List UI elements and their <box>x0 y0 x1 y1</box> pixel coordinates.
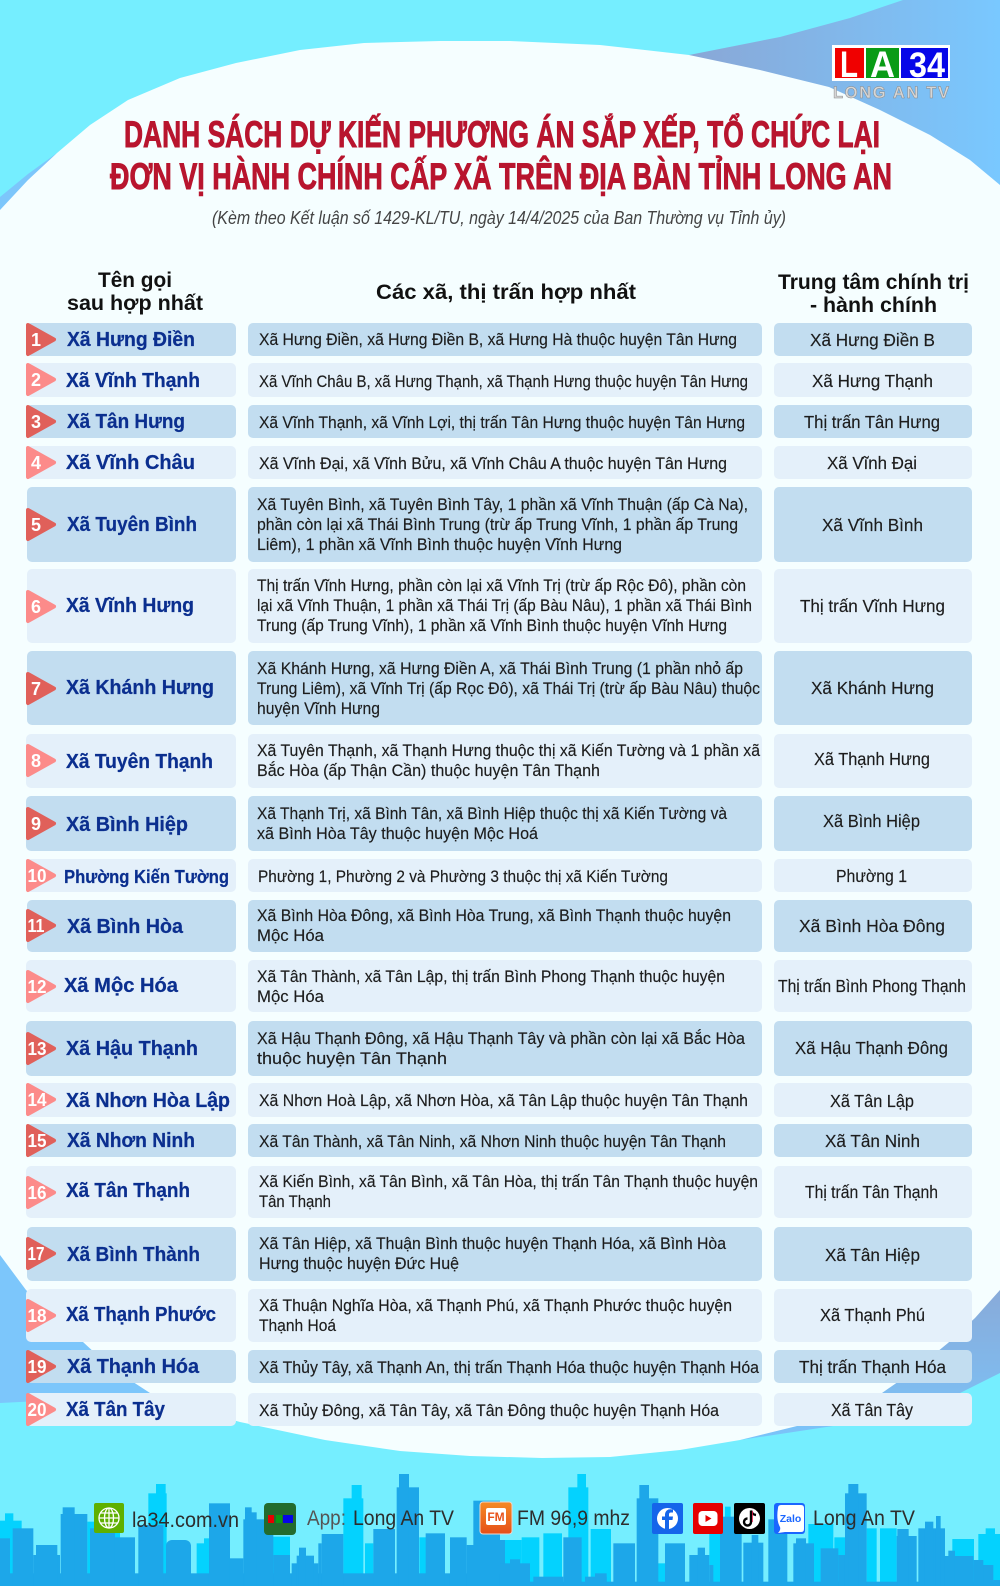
row 15: Xã Nhơn Ninh <box>67 1129 195 1152</box>
row 6: lại xã Vĩnh Thuận, 1 phần xã Thái Trị (ấp Bàu Nâu), 1 phần xã Thái Bình <box>257 597 752 615</box>
row 1: Xã Hưng Điền, xã Hưng Điền B, xã Hưng Hà thuộc huyện Tân Hưng <box>259 331 737 349</box>
footer: zalo label: Long An TV <box>813 1507 915 1530</box>
row 17: 17 <box>28 1244 44 1264</box>
row 7: Xã Khánh Hưng, xã Hưng Điền A, xã Thái Bình Trung (1 phần nhỏ ấp <box>257 660 743 678</box>
row 18 <box>26 1289 972 1342</box>
row 7: Xã Khánh Hưng <box>66 676 214 699</box>
row 7: huyện Vĩnh Hưng <box>257 700 380 718</box>
row 10 <box>26 859 972 892</box>
row 4: 4 <box>31 453 41 473</box>
row 6 <box>27 569 972 643</box>
row 12: Mộc Hóa <box>257 988 325 1006</box>
row 13: 13 <box>28 1039 46 1059</box>
footer: FM radio <box>480 1502 630 1534</box>
footer: app: App: <box>307 1507 346 1530</box>
row 1: Xã Hưng Điền B <box>810 330 935 350</box>
row 5 <box>27 487 972 562</box>
row 6: Thị trấn Vĩnh Hưng, phần còn lại xã Vĩnh Trị (trừ ấp Rộc Đô), phần còn <box>257 577 746 595</box>
icon: facebook <box>652 1503 683 1534</box>
logo: 34 <box>909 46 945 85</box>
row 11: Xã Bình Hòa Đông, xã Bình Hòa Trung, xã Bình Thạnh thuộc huyện <box>257 907 731 925</box>
row 9: Xã Thạnh Trị, xã Bình Tân, xã Bình Hiệp thuộc thị xã Kiến Tường và <box>257 805 728 823</box>
row 9: xã Bình Hòa Tây thuộc huyện Mộc Hoá <box>257 825 539 843</box>
row 16: Tân Thạnh <box>259 1193 331 1211</box>
row 5: 5 <box>31 515 41 535</box>
row 1: Xã Hưng Điền <box>67 328 195 351</box>
footer: website <box>94 1503 239 1533</box>
row 4: Xã Vĩnh Đại, xã Vĩnh Bửu, xã Vĩnh Châu A thuộc huyện Tân Hưng <box>259 455 727 473</box>
row 5: Xã Vĩnh Bình <box>822 515 923 535</box>
title <box>110 112 892 197</box>
footer: FM radio: FM <box>487 1510 505 1524</box>
row 12 <box>26 960 972 1012</box>
row 2: Xã Hưng Thạnh <box>812 371 933 391</box>
row 12: Thị trấn Bình Phong Thạnh <box>778 976 966 996</box>
row 10: Phường 1, Phường 2 và Phường 3 thuộc thị xã Kiến Tường <box>258 868 668 886</box>
row 1: 1 <box>31 330 41 350</box>
row 12: 12 <box>28 977 46 997</box>
logo <box>832 44 950 102</box>
row 7: Xã Khánh Hưng <box>811 678 934 698</box>
row 13: Xã Hậu Thạnh Đông <box>795 1038 948 1058</box>
row 8: Xã Tuyên Thạnh <box>66 750 213 773</box>
row 15: Xã Tân Ninh <box>825 1131 920 1151</box>
row 11: Mộc Hóa <box>257 927 325 945</box>
row 20: Xã Thủy Đông, xã Tân Tây, xã Tân Đông thuộc huyện Thạnh Hóa <box>259 1402 720 1420</box>
row 20: Xã Tân Tây <box>66 1398 166 1421</box>
row 7 <box>27 651 972 725</box>
row 8: Xã Tuyên Thạnh, xã Thạnh Hưng thuộc thị xã Kiến Tường và 1 phần xã <box>257 742 761 760</box>
row 14: Xã Nhơn Hoà Lập, xã Nhơn Hòa, xã Tân Lập thuộc huyện Tân Thạnh <box>259 1092 748 1110</box>
row 17 <box>27 1227 972 1281</box>
row 15 <box>26 1124 972 1157</box>
row 19: Xã Thủy Tây, xã Thạnh An, thị trấn Thạnh Hóa thuộc huyện Thạnh Hóa <box>259 1359 760 1377</box>
icon: zalo <box>774 1503 805 1534</box>
row 18: Xã Thạnh Phước <box>66 1303 216 1326</box>
row 14: Xã Tân Lập <box>830 1091 914 1111</box>
row 13 <box>26 1021 972 1076</box>
row 10: Phường Kiến Tường <box>64 866 229 887</box>
row 2: 2 <box>31 370 41 390</box>
row 3: Xã Vĩnh Thạnh, xã Vĩnh Lợi, thị trấn Tân Hưng thuộc huyện Tân Hưng <box>259 414 745 432</box>
row 10: Phường 1 <box>836 866 907 886</box>
row 20: 20 <box>28 1400 46 1420</box>
row 13: thuộc huyện Tân Thạnh <box>257 1050 447 1068</box>
row 2: Xã Vĩnh Châu B, xã Hưng Thạnh, xã Thạnh Hưng thuộc huyện Tân Hưng <box>259 373 748 391</box>
row 9 <box>26 796 972 851</box>
row 18: Xã Thuận Nghĩa Hòa, xã Thạnh Phú, xã Thạnh Phước thuộc huyện <box>259 1297 732 1315</box>
row 13: Xã Hậu Thạnh <box>66 1037 198 1060</box>
row 19: Thị trấn Thạnh Hóa <box>799 1357 946 1377</box>
column headers: Trung tâm chính trị <box>778 271 969 294</box>
row 15: Xã Tân Thành, xã Tân Ninh, xã Nhơn Ninh thuộc huyện Tân Thạnh <box>259 1133 726 1151</box>
column headers: - hành chính <box>810 294 937 317</box>
row 8 <box>26 734 972 788</box>
row 6: Thị trấn Vĩnh Hưng <box>800 596 945 616</box>
row 18: 18 <box>28 1306 46 1326</box>
row 3 <box>26 405 972 438</box>
row 9: 9 <box>31 814 41 834</box>
row 19: 19 <box>28 1357 46 1377</box>
row 6: Xã Vĩnh Hưng <box>66 594 194 617</box>
row 14: 14 <box>28 1090 46 1110</box>
row 2: Xã Vĩnh Thạnh <box>66 369 200 392</box>
icon: youtube <box>693 1503 723 1534</box>
column headers: Các xã, thị trấn hợp nhất <box>376 281 636 304</box>
row 20: Xã Tân Tây <box>831 1400 913 1420</box>
city skyline <box>0 1474 1000 1586</box>
row 11 <box>27 900 972 952</box>
footer: app: Long An TV <box>353 1507 454 1530</box>
row 11: Xã Bình Hòa Đông <box>799 916 945 936</box>
row 6: 6 <box>31 597 41 617</box>
logo: L <box>840 44 858 85</box>
row 10: 10 <box>28 866 46 886</box>
row 17: Xã Tân Hiệp, xã Thuận Bình thuộc huyện Thạnh Hóa, xã Bình Hòa <box>259 1235 727 1253</box>
column headers: sau hợp nhất <box>67 292 203 315</box>
row 4: Xã Vĩnh Đại <box>827 453 917 473</box>
row 12: Xã Mộc Hóa <box>64 974 179 997</box>
footer: FM radio: FM 96,9 mhz <box>517 1507 630 1530</box>
row 20 <box>26 1393 972 1426</box>
row 8: Xã Thạnh Hưng <box>814 749 930 769</box>
row 2 <box>26 363 972 397</box>
row 19: Xã Thạnh Hóa <box>67 1355 200 1378</box>
row 13: Xã Hậu Thạnh Đông, xã Hậu Thạnh Tây và phần còn lại xã Bắc Hòa <box>257 1029 746 1048</box>
row 16: 16 <box>28 1183 46 1203</box>
row 8: Bắc Hòa (ấp Thận Cần) thuộc huyện Tân Thạnh <box>257 761 600 780</box>
bottom right blue shape <box>740 1275 1000 1440</box>
row 16: Xã Kiến Bình, xã Tân Bình, xã Tân Hòa, thị trấn Tân Thạnh thuộc huyện <box>259 1173 758 1191</box>
icon: tiktok <box>734 1503 765 1534</box>
row 14 <box>26 1083 972 1117</box>
row 12: Xã Tân Thành, xã Tân Lập, thị trấn Bình Phong Thạnh thuộc huyện <box>257 968 725 986</box>
row 17: Xã Tân Hiệp <box>825 1245 920 1265</box>
row 16 <box>26 1166 972 1218</box>
footer: website: la34.com.vn <box>132 1509 239 1532</box>
icon: zalo: Zalo <box>780 1513 801 1525</box>
row 14: Xã Nhơn Hòa Lập <box>66 1089 230 1112</box>
row 7: 7 <box>31 679 41 699</box>
row 3: Thị trấn Tân Hưng <box>804 412 940 432</box>
row 18: Thạnh Hoá <box>259 1317 337 1335</box>
row 5: phần còn lại xã Thái Bình Trung (trừ ấp Trung Vĩnh, 1 phần ấp Trung <box>257 516 738 534</box>
row 16: Xã Tân Thạnh <box>66 1179 190 1202</box>
row 9: Xã Bình Hiệp <box>66 813 188 836</box>
row 3: 3 <box>31 412 41 432</box>
row 16: Thị trấn Tân Thạnh <box>805 1182 938 1202</box>
subtitle: (Kèm theo Kết luận số 1429-KL/TU, ngày 14/4/2025 của Ban Thường vụ Tỉnh ủy) <box>212 208 786 228</box>
bottom left blue shape <box>0 1250 170 1403</box>
row 11: Xã Bình Hòa <box>67 915 184 938</box>
column headers: Tên gọi <box>98 269 172 292</box>
row 1 <box>26 323 972 356</box>
row 8: 8 <box>31 751 41 771</box>
top right blue shape <box>660 0 1000 200</box>
logo: LONG AN TV <box>833 84 949 102</box>
row 17: Hưng thuộc huyện Đức Huệ <box>259 1255 459 1273</box>
row 5: Xã Tuyên Bình <box>67 513 197 536</box>
row 11: 11 <box>28 916 44 936</box>
row 9: Xã Bình Hiệp <box>823 811 920 831</box>
row 5: Xã Tuyên Bình, xã Tuyên Bình Tây, 1 phần xã Vĩnh Thuận (ấp Cà Na), <box>257 496 748 514</box>
row 19 <box>26 1350 972 1383</box>
row 4: Xã Vĩnh Châu <box>66 451 195 474</box>
row 15: 15 <box>28 1131 46 1151</box>
row 4 <box>26 446 972 479</box>
top left blue sliver <box>0 153 57 215</box>
row 18: Xã Thạnh Phú <box>820 1305 925 1325</box>
row 17: Xã Bình Thành <box>67 1243 200 1266</box>
row 6: Trung (ấp Trung Vĩnh), 1 phần xã Vĩnh Bình thuộc huyện Vĩnh Hưng <box>257 617 727 635</box>
column headers <box>67 269 969 317</box>
logo: A <box>870 44 895 85</box>
row 3: Xã Tân Hưng <box>67 410 185 433</box>
row 5: Liêm), 1 phần xã Vĩnh Bình thuộc huyện Vĩnh Hưng <box>257 536 622 554</box>
footer: app <box>264 1503 454 1535</box>
row 7: Trung Liêm), xã Vĩnh Trị (ấp Rọc Đô), xã Thái Trị (trừ ấp Bàu Nâu) thuộc <box>257 680 760 698</box>
